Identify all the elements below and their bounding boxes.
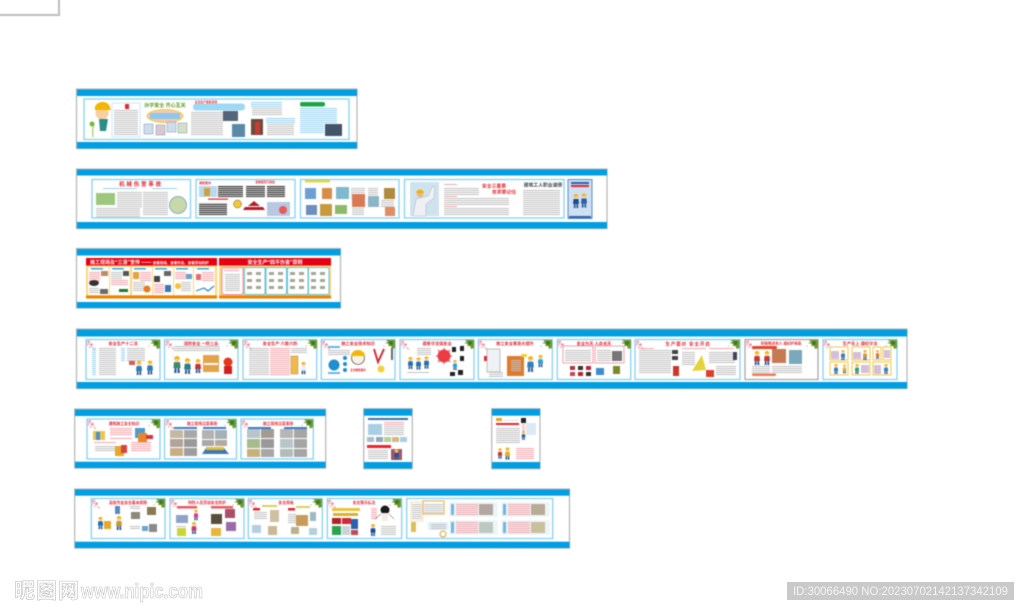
panel: four no-harm principles	[219, 258, 331, 298]
panel: construction safety items B	[241, 419, 313, 459]
panel: personal protection	[170, 498, 244, 538]
photo: engineer pointing up	[410, 182, 439, 216]
panel: construction site notes: 施工安全素质大提升	[496, 340, 534, 347]
panel: personal protection: 持险人员劳动安全防护	[188, 500, 226, 505]
panel: six protection	[243, 340, 317, 380]
panel: production rules	[635, 340, 740, 380]
corner frame mark	[0, 0, 59, 15]
panel: safety signs	[327, 498, 402, 538]
text block: workers' ethics: 建筑工人职业道德	[524, 182, 562, 188]
graphic: slogan oval and photos	[144, 110, 187, 135]
panel: illustrated accident cases	[300, 180, 399, 218]
panel: prevention hazards	[164, 340, 238, 380]
board: small safety knowledge board	[364, 409, 412, 469]
panel: safety three essentials	[404, 180, 564, 218]
panel: accident charts: 课程要求	[199, 180, 211, 185]
panel: construction safety items A	[164, 419, 236, 459]
heading: three essentials: 安全三重要	[482, 182, 506, 190]
panel: construction safety items A: 施工现场注意事项	[187, 421, 217, 426]
panel: safety signs: 安全警示标志	[353, 500, 376, 505]
panel: three clears publicity	[86, 258, 217, 298]
panel: accident charts	[196, 180, 295, 218]
panel: machinery accidents	[92, 180, 190, 218]
panel: machinery accidents: 机械伤害事故	[119, 180, 163, 188]
panel: machinery operations safety	[91, 498, 165, 538]
board 1: safety awareness strip	[76, 89, 357, 148]
text block: safety notes	[112, 103, 140, 137]
watermark logo	[14, 580, 203, 603]
panel: twelve rules: 安全生产十二法	[108, 340, 138, 347]
panel: site safety knowledge	[87, 419, 160, 459]
watermark logo: www.nipic.com	[80, 581, 203, 603]
panel: site safety signs	[321, 340, 395, 380]
board 5: construction site strip	[75, 409, 326, 468]
icon: boy with hard hat	[90, 102, 111, 137]
panel: site safety knowledge: 建筑施工安全知识	[109, 421, 139, 426]
panel: accident charts: 事故类型与原因	[255, 180, 275, 184]
heading and contents	[367, 418, 408, 460]
image id badge: ID:30066490 NO:20230702142137342109	[793, 586, 1008, 598]
board 4: long safety production strip	[76, 329, 907, 388]
board: small safety notice board	[492, 409, 540, 469]
panel: site safety warnings	[400, 340, 474, 380]
panel: prevention hazards: 消防安全 一防三会	[184, 340, 219, 347]
panel: safety first: 安全为天 人命关天	[577, 340, 612, 347]
panel: production and labor: 生产无上 遵纪守法	[843, 340, 878, 347]
panel: protect yourself and others: 积极推进亲人 遵纪护家庭	[761, 340, 802, 346]
watermark logo: 昵图网	[14, 580, 79, 603]
panel: safety operations	[248, 498, 322, 538]
section: green title notes	[300, 102, 342, 136]
panel: wide awareness board	[84, 99, 349, 140]
panel: four no-harm principles: 安全生产“四不伤害”原则	[247, 259, 303, 266]
card: case one	[449, 502, 498, 517]
card: case two	[501, 502, 550, 517]
panel: six protection: 安全生产 六要六防	[263, 340, 297, 347]
text block: safety rules	[444, 184, 509, 215]
heading: three essentials	[482, 182, 516, 196]
heading: three essentials: 务求要记住	[492, 188, 516, 196]
panel: three clears publicity: 施工现场及“三清”宣传 —— 查看现场、查看作业、查看劳动防护	[90, 259, 209, 266]
panel: construction safety items B: 施工现场注意事项	[263, 421, 293, 426]
poster: workers' occupational ethics	[568, 180, 592, 218]
panel: twelve rules	[86, 340, 160, 380]
panel: safety first	[557, 340, 631, 380]
board 6: bottom safety strip	[75, 489, 569, 548]
panel: site safety signs: 安全帽要戴好	[350, 368, 366, 372]
section: safety text with photos	[191, 100, 245, 137]
panel: construction site notes	[478, 340, 552, 380]
panel: protect yourself and others	[745, 340, 818, 380]
section: blue notes with worker	[251, 101, 295, 136]
panel: safety operations: 安全用电	[278, 500, 294, 505]
panel: site safety warnings: 遵章守法保安全	[422, 340, 452, 347]
image id badge	[787, 582, 1014, 600]
text block: orange notes	[411, 501, 448, 537]
text block: workers' ethics	[523, 182, 562, 215]
board 2: machinery injury strip	[76, 169, 607, 228]
board 3: site publicity strip	[76, 248, 340, 308]
heading: slogan: 孙学安全 齐心互关	[144, 102, 186, 109]
card: case four	[501, 520, 550, 535]
section: safety text with photos: 安全生产重要事项	[195, 100, 217, 104]
card: case three	[449, 520, 498, 535]
panel: machinery operations safety: 高处作业安全基本原则	[109, 500, 147, 505]
panel: site safety signs: 施工安全技术知识	[341, 340, 376, 347]
panel: site safety cases	[407, 498, 553, 538]
panel: production rules: 生产面对 安全开启	[665, 340, 711, 348]
panel: production and labor	[823, 340, 897, 380]
heading and contents	[496, 418, 536, 460]
